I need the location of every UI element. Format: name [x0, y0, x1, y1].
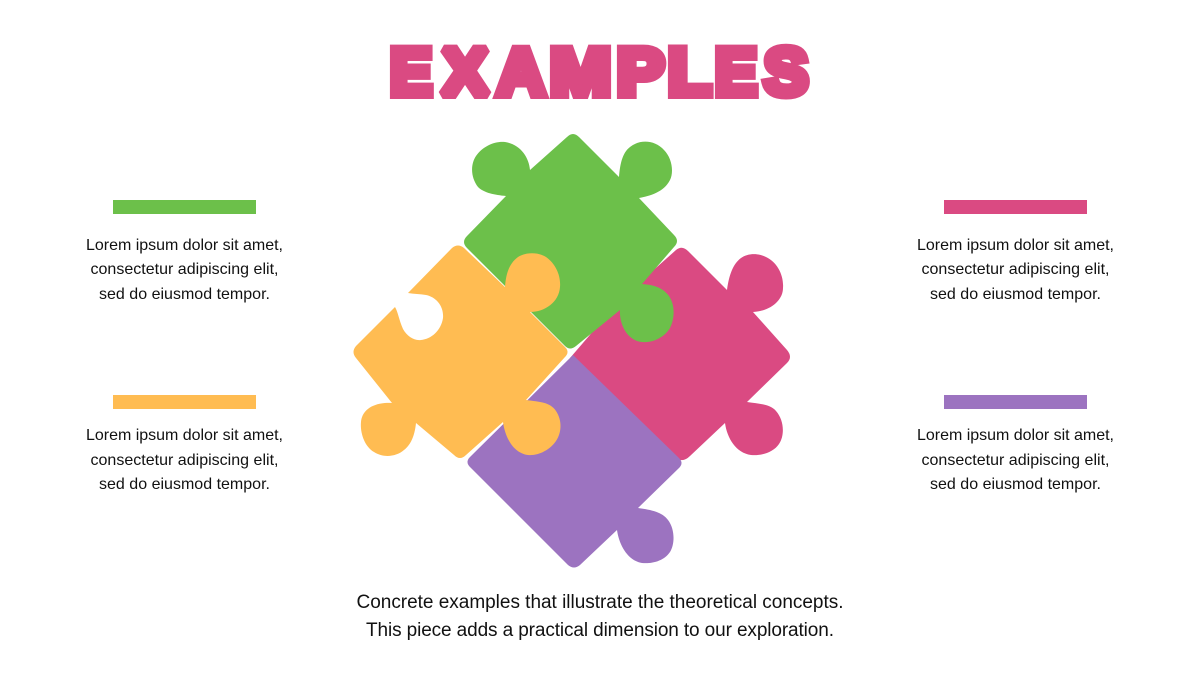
left item: orange: [86, 395, 283, 493]
pink item text: consectetur adipiscing elit,: [922, 261, 1110, 278]
title: M: [550, 34, 611, 108]
title: E: [390, 34, 432, 108]
title: P: [617, 34, 664, 108]
caption: This piece adds a practical dimension to our exploration.: [366, 620, 834, 641]
puzzle piece: green: [464, 134, 677, 348]
green bar: [113, 200, 256, 214]
orange item text: sed do eiusmod tempor.: [99, 476, 270, 493]
title: S: [764, 34, 808, 108]
orange bar: [113, 395, 256, 409]
orange item text: consectetur adipiscing elit,: [90, 452, 278, 469]
pink item text: Lorem ipsum dolor sit amet,: [917, 237, 1114, 254]
right item: pink: [917, 200, 1114, 303]
pink item text: sed do eiusmod tempor.: [930, 286, 1101, 303]
title: X: [442, 34, 488, 108]
green item text: Lorem ipsum dolor sit amet,: [86, 237, 283, 254]
pink bar: [944, 200, 1087, 214]
title: E: [715, 34, 757, 108]
caption: Concrete examples that illustrate the theoretical concepts.: [356, 592, 844, 613]
title: A: [497, 34, 545, 108]
purple bar: [944, 395, 1087, 409]
purple item text: consectetur adipiscing elit,: [922, 452, 1110, 469]
title: [390, 34, 808, 108]
puzzle piece: pink: [570, 248, 790, 460]
green item text: sed do eiusmod tempor.: [99, 286, 270, 303]
orange item text: Lorem ipsum dolor sit amet,: [86, 427, 283, 444]
puzzle piece: purple: [468, 355, 682, 568]
caption: [356, 592, 844, 641]
purple item text: Lorem ipsum dolor sit amet,: [917, 427, 1114, 444]
purple item text: sed do eiusmod tempor.: [930, 476, 1101, 493]
green item text: [86, 237, 283, 303]
title: L: [668, 34, 711, 108]
right item: purple: [917, 395, 1114, 493]
pink item text: [917, 237, 1114, 303]
green item text: consectetur adipiscing elit,: [90, 261, 278, 278]
left item: green: [86, 200, 283, 303]
puzzle graphic: [354, 134, 790, 568]
purple item text: [917, 427, 1114, 493]
orange item text: [86, 427, 283, 493]
puzzle piece: orange: [354, 246, 568, 458]
